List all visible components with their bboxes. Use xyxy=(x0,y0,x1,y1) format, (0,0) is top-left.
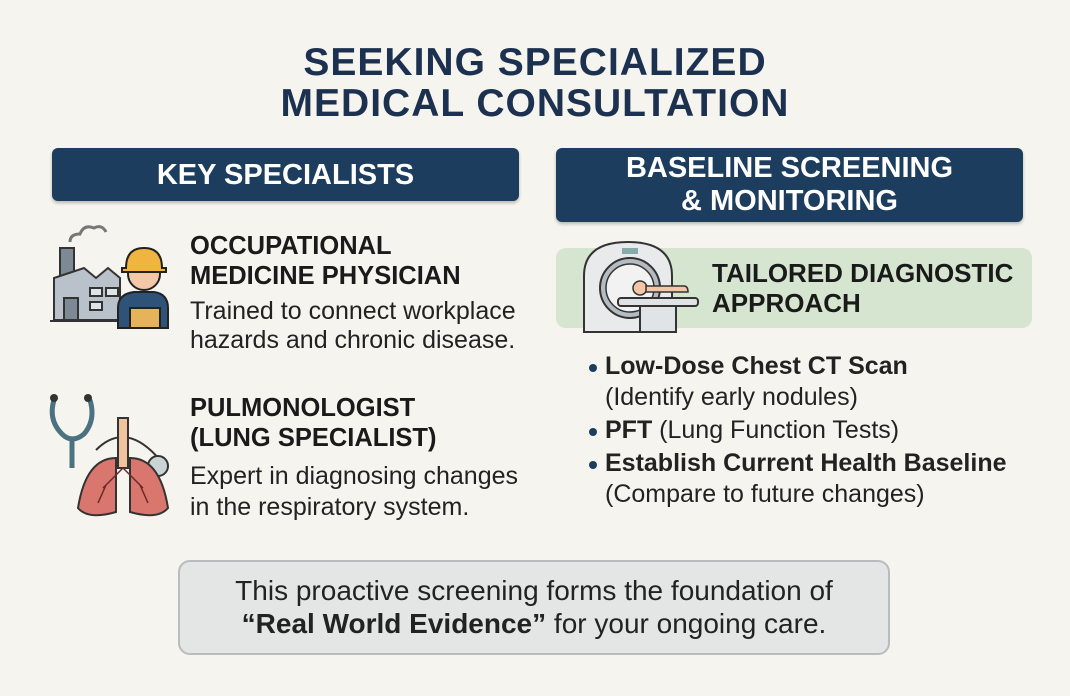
bullet list: diagnostics: (Identify early nodules) xyxy=(605,383,858,411)
text: occupational medicine: OCCUPATIONAL xyxy=(190,232,392,260)
text: pulmonologist: Expert in diagnosing changes xyxy=(190,462,518,490)
header: key specialists: KEY SPECIALISTS xyxy=(157,159,414,191)
text: pulmonologist xyxy=(190,394,518,521)
header: key specialists xyxy=(52,148,519,201)
heading: tailored diagnostic: APPROACH xyxy=(712,288,861,318)
bullet list: diagnostics: PFT (Lung Function Tests) xyxy=(605,416,899,444)
icon: lungs with stethoscope xyxy=(50,394,169,516)
bullet list: diagnostics: Establish Current Health Baseline xyxy=(605,449,1007,477)
text: pulmonologist: (LUNG SPECIALIST) xyxy=(190,424,436,452)
callout: real world evidence: This proactive screening forms the foundation of xyxy=(235,575,833,606)
text: occupational medicine xyxy=(190,232,516,354)
icon: factory worker xyxy=(50,225,169,329)
title: SEEKING SPECIALIZED xyxy=(303,41,767,84)
text: occupational medicine: hazards and chronic disease. xyxy=(190,326,515,354)
text: pulmonologist: PULMONOLOGIST xyxy=(190,394,415,422)
text: pulmonologist: in the respiratory system. xyxy=(190,493,469,521)
header: baseline screening: & MONITORING xyxy=(681,185,898,217)
callout: real world evidence xyxy=(178,560,890,655)
panel: tailored diagnostic approach xyxy=(556,248,1032,328)
heading: tailored diagnostic: TAILORED DIAGNOSTIC xyxy=(712,258,1013,288)
bullet list: diagnostics xyxy=(589,352,1007,508)
bullet list: diagnostics: Low-Dose Chest CT Scan xyxy=(605,352,908,380)
header: baseline screening: BASELINE SCREENING xyxy=(626,152,953,184)
text: occupational medicine: Trained to connect workplace xyxy=(190,297,516,325)
callout: real world evidence: “Real World Evidence” for your ongoing care. xyxy=(242,608,826,639)
header: baseline screening xyxy=(556,148,1023,222)
icon: ct scanner xyxy=(583,241,699,333)
title xyxy=(281,41,789,125)
bullet list: diagnostics: (Compare to future changes) xyxy=(605,480,925,508)
text: occupational medicine: MEDICINE PHYSICIAN xyxy=(190,262,461,290)
heading: tailored diagnostic xyxy=(712,258,1013,318)
title: MEDICAL CONSULTATION xyxy=(281,82,789,125)
